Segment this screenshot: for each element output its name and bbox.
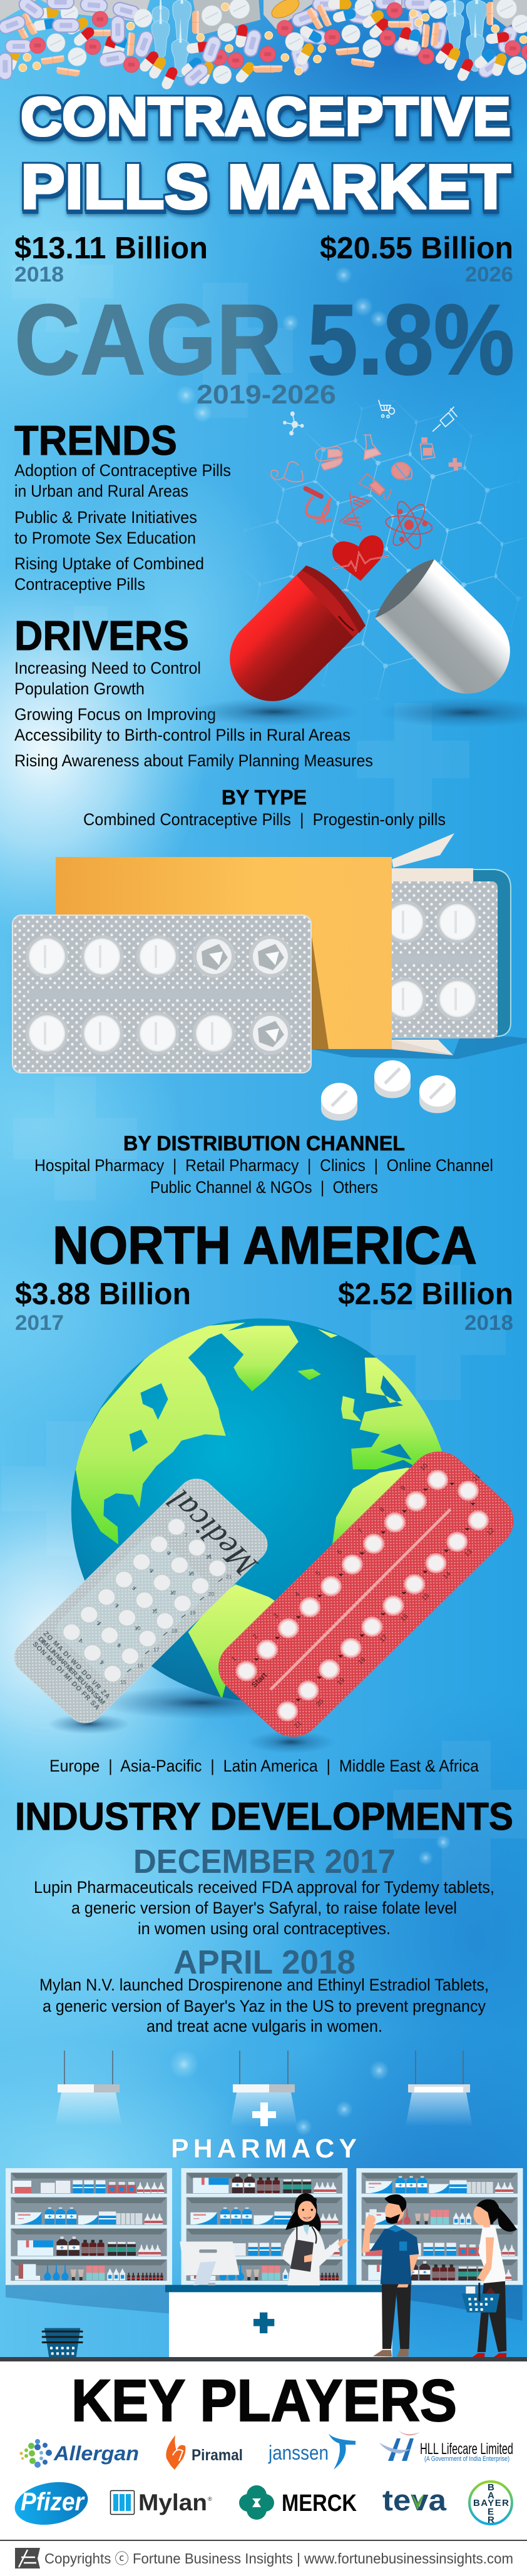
pack: red blister: 8	[379, 1506, 386, 1513]
development: December 2017: a generic version of Bayer's Safyral, to raise folate level	[71, 1899, 457, 1917]
pack: red blister: 3	[273, 1613, 280, 1620]
stat: north america 2018	[338, 1277, 513, 1335]
text block: drivers: Rising Awareness about Family Planning Measures	[14, 751, 373, 770]
logo: Janssen	[268, 2433, 356, 2470]
pack: red blister: 4	[294, 1591, 302, 1598]
logo: Bayer: E	[488, 2507, 494, 2517]
logo: Bayer: R	[488, 2515, 494, 2525]
text block: trends: Rising Uptake of Combined	[14, 554, 204, 573]
stat: north america 2017: 2017	[15, 1311, 64, 1335]
title: PILLS MARKET	[21, 152, 511, 222]
logo: Merck	[239, 2485, 357, 2520]
pack: silver blister: 1	[80, 1638, 83, 1643]
pack: red blister: 20	[315, 1698, 325, 1708]
heading: by distribution channel: BY DISTRIBUTION CHANNEL	[123, 1132, 405, 1155]
text: distribution channels	[34, 1156, 493, 1197]
pack: red blister: 10	[419, 1463, 429, 1473]
heading: trends: TRENDS	[14, 417, 177, 464]
pack: silver blister: 10	[135, 1625, 141, 1631]
pack: red blister: 19	[336, 1677, 347, 1686]
pack: silver blister: 8	[101, 1659, 104, 1665]
figure: customer man	[362, 2194, 419, 2356]
pack: silver blister: 2	[97, 1620, 100, 1626]
pack: red blister: 2	[252, 1633, 260, 1640]
text block: drivers: Increasing Need to Control	[14, 659, 201, 677]
stat: 2018 market size	[14, 231, 208, 287]
stat: 2026 market size: 2026	[465, 263, 513, 287]
stat: north america 2018: 2018	[464, 1311, 513, 1335]
stat: CAGR: 2019-2026	[197, 380, 336, 410]
pack: silver blister: 5	[150, 1568, 153, 1574]
heading: drivers: DRIVERS	[14, 612, 189, 659]
development: April 2018: APRIL 2018	[173, 1944, 356, 1981]
logo: Teva: teva	[382, 2483, 447, 2517]
stat: north america 2017	[15, 1277, 191, 1335]
pack: red blister: 15	[421, 1592, 431, 1602]
panel: key players background	[0, 2361, 527, 2576]
logo: Piramal	[166, 2435, 243, 2470]
pack: silver blister: 15	[120, 1679, 126, 1685]
panel: centre shelf unit	[181, 2168, 347, 2285]
divider line	[0, 2540, 527, 2541]
text block: drivers: Accessibility to Birth-control Pills in Rural Areas	[14, 726, 350, 744]
text block: drivers: Growing Focus on Improving	[14, 705, 216, 724]
text block: trends	[14, 461, 231, 594]
pack: red blister: 21	[293, 1720, 304, 1730]
pack: red blister: 11	[472, 1473, 482, 1483]
logo: Allergan: Allergan	[53, 2442, 139, 2465]
sign: pharmacy: PHARMACY	[171, 2134, 357, 2164]
pack: silver blister: 21	[226, 1574, 232, 1580]
floor line	[0, 2357, 527, 2361]
development: December 2017: Lupin Pharmaceuticals received FDA approval for Tydemy tablets,	[34, 1878, 494, 1897]
pack: red blister: 17	[379, 1634, 389, 1644]
panel: right shelf unit	[356, 2168, 523, 2285]
icon: flask	[364, 435, 381, 460]
pack: red blister: 13	[464, 1548, 474, 1558]
icon: DNA	[340, 493, 371, 530]
icon: atom	[385, 499, 433, 551]
pack: silver blister: 18	[171, 1628, 178, 1634]
icon: tablet	[392, 463, 412, 480]
text block: trends: to Promote Sex Education	[14, 529, 196, 547]
pack: silver blister: 16	[137, 1663, 143, 1668]
sign: pharmacy cross	[252, 2102, 276, 2126]
pack: silver blister: 14	[206, 1554, 212, 1560]
icon: capsule pair	[315, 446, 343, 470]
pack: silver blister: Medical	[160, 1483, 265, 1583]
map: greenland	[220, 1326, 299, 1391]
pack: red blister: 12	[486, 1527, 496, 1537]
pack: silver blister: 20	[208, 1591, 215, 1597]
figure: customer woman	[462, 2199, 517, 2357]
panel: left shelf unit	[6, 2168, 172, 2285]
icon: medicine bottle tipped	[359, 474, 391, 500]
development: April 2018: and treat acne vulgaris in women.	[146, 2017, 382, 2036]
pack: red blister: 1	[230, 1655, 238, 1663]
development: December 2017: in women using oral contraceptives.	[138, 1919, 391, 1938]
footer: copyright: Copyrights ⓒ Fortune Business Insights | www.fortunebusinessinsights.com	[44, 2550, 513, 2567]
logo: Piramal: Piramal	[192, 2447, 243, 2464]
pack: red blister: 18	[357, 1656, 367, 1666]
stat: 2026 market size	[320, 231, 513, 287]
logo: Bayer: B	[488, 2482, 494, 2493]
stat: north america 2018: $2.52 Billion	[338, 1277, 513, 1311]
text: distribution channels: Hospital Pharmacy | Retail Pharmacy | Clinics | Online Channel	[34, 1156, 493, 1175]
development: April 2018: Mylan N.V. launched Drospirenone and Ethinyl Estradiol Tablets,	[39, 1975, 489, 1994]
illustration: red capsule half	[230, 565, 366, 701]
text block: trends: Public & Private Initiatives	[14, 508, 197, 527]
illustration: globe with birth-control packs	[7, 1319, 525, 1748]
stat: north america 2017: $3.88 Billion	[15, 1277, 191, 1311]
text block: trends: in Urban and Rural Areas	[14, 482, 188, 500]
pack: silver blister: SON MO DI MI DO FR SA	[31, 1641, 101, 1711]
pack: red blister: Start	[250, 1670, 269, 1689]
text: distribution channels: Public Channel & NGOs | Others	[150, 1178, 378, 1197]
pack: red blister: 14	[442, 1571, 453, 1581]
map: africa	[332, 1468, 410, 1544]
illustration: ceiling lights	[55, 2051, 473, 2127]
text block: trends: Adoption of Contraceptive Pills	[14, 461, 231, 480]
pack: silver blister: 19	[190, 1610, 196, 1616]
icon: syringe	[433, 407, 457, 431]
map: south america	[188, 1585, 279, 1699]
pack: silver blister: ZO MA DI WO DO VR ZA	[41, 1630, 111, 1700]
pack: red blister: 16	[399, 1613, 410, 1623]
icon: molecule	[284, 412, 304, 435]
illustration: pill box with blister packs	[13, 833, 527, 1121]
illustration: white capsule half	[375, 559, 510, 694]
title	[21, 87, 511, 222]
figure: pharmacist	[282, 2193, 349, 2285]
logo: Mylan: Mylan	[138, 2490, 207, 2515]
icons: medical symbols over capsule	[271, 400, 462, 581]
development: December 2017: DECEMBER 2017	[133, 1843, 396, 1880]
icon: cart	[379, 400, 394, 418]
logo: Janssen: janssen	[268, 2442, 329, 2464]
pack: silver blister: 7	[185, 1532, 188, 1538]
map: iceland	[297, 1329, 338, 1380]
development: April 2018: a generic version of Bayer's Yaz in the US to prevent pregnancy	[43, 1997, 486, 2016]
pack: red blister: 9	[399, 1485, 407, 1492]
icon: cross	[449, 458, 462, 470]
pack: silver blister: 13	[188, 1571, 195, 1576]
icon: stacked baskets	[42, 2328, 83, 2357]
heading: north america: NORTH AMERICA	[53, 1216, 477, 1275]
logo: Mylan: ®	[208, 2496, 212, 2502]
stat: 2026 market size: $20.55 Billion	[320, 231, 513, 265]
text: types: Combined Contraceptive Pills | Progestin-only pills	[83, 810, 446, 829]
pack: silver blister: 3	[115, 1603, 118, 1608]
stat: 2018 market size: 2018	[14, 263, 64, 287]
title: CONTRACEPTIVE	[21, 87, 511, 147]
pack: red blister: 5	[315, 1570, 322, 1577]
text block: trends: Contraceptive Pills	[14, 575, 145, 594]
logo: Bayer: BAYER	[473, 2498, 509, 2508]
pack: silver blister: DIM LUN MAR MER JEU VEN SAM	[36, 1635, 106, 1706]
text block: drivers	[14, 659, 373, 770]
stat: 2018 market size: $13.11 Billion	[14, 231, 208, 265]
heading: key players: KEY PLAYERS	[71, 2368, 457, 2434]
logo: Bayer: A	[488, 2490, 494, 2501]
pack: silver blister: 17	[153, 1646, 160, 1653]
logo: Merck: MERCK	[282, 2490, 357, 2517]
logo: Fortune Business Insights	[15, 2548, 40, 2568]
logo: Pfizer	[11, 2477, 91, 2530]
shadows beneath globe and packs	[48, 1686, 335, 1753]
panel: counter	[165, 2285, 396, 2357]
logo: HLL Lifecare	[379, 2430, 513, 2463]
development: April 2018	[39, 1944, 489, 2036]
network of hexagons behind the capsule	[238, 400, 527, 713]
pack: silver blister: 11	[152, 1608, 158, 1615]
map: europe	[341, 1357, 446, 1469]
logo: Mylan	[110, 2490, 212, 2515]
icon: stethoscope	[271, 462, 303, 482]
pack: red blister	[207, 1441, 525, 1748]
logo: Allergan	[20, 2439, 139, 2468]
development: December 2017	[34, 1843, 494, 1938]
heading: by type: BY TYPE	[222, 786, 307, 809]
pack: silver blister: 4	[132, 1585, 135, 1591]
icon: monitor	[180, 2241, 239, 2285]
map: north america	[76, 1322, 245, 1544]
icon: heart with pulse	[332, 535, 388, 581]
icon: microscope	[305, 489, 330, 523]
text: other regions: Europe | Asia-Pacific | Latin America | Middle East & Africa	[49, 1757, 479, 1775]
pack: silver blister	[7, 1472, 275, 1730]
pack: silver blister: 9	[118, 1643, 121, 1649]
logo: Bayer	[469, 2482, 512, 2525]
shadow: capsule halves	[190, 697, 527, 728]
icon: bottle	[421, 438, 435, 460]
text block: drivers: Population Growth	[14, 679, 145, 698]
illustration: pile of pills along the top	[0, 0, 527, 91]
pack: silver blister: 12	[170, 1590, 177, 1596]
pack: red blister: 7	[357, 1528, 365, 1535]
logo: Pfizer: Pfizer	[21, 2487, 85, 2516]
illustration: pharmacy scene	[6, 2168, 523, 2357]
pack: red blister: 6	[336, 1549, 344, 1556]
pack: silver blister: 6	[167, 1550, 170, 1556]
